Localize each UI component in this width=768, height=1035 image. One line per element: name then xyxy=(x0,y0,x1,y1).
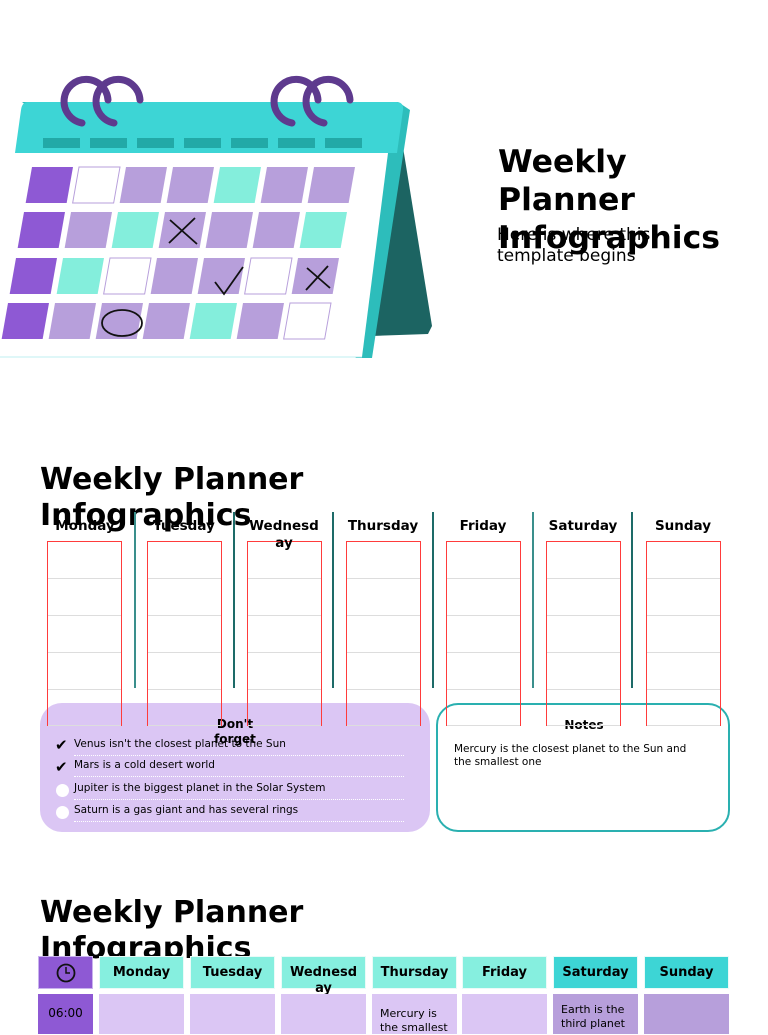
weekly columns: Sunday xyxy=(655,518,711,534)
checklist: Mars is a cold desert world xyxy=(74,759,215,771)
header dashes xyxy=(43,138,362,148)
header band xyxy=(15,102,403,153)
panel: notes xyxy=(436,703,730,832)
schedule table: Sunday xyxy=(659,965,714,980)
subtitle: Here is where this template begins xyxy=(497,225,650,266)
weekly columns: Tuesday xyxy=(153,518,215,534)
schedule table: Saturday xyxy=(562,965,629,980)
checklist xyxy=(55,736,404,822)
page edge xyxy=(22,102,410,358)
marks xyxy=(102,218,330,336)
schedule table: Thursday xyxy=(381,965,448,980)
title: top: Weekly Planner Infographics xyxy=(498,144,720,256)
heading: don't forget: Don't forget xyxy=(214,717,256,746)
stand back xyxy=(372,104,432,336)
rings xyxy=(64,79,350,123)
checklist: Saturn is a gas giant and has several rings xyxy=(74,804,298,816)
section 3 title: Weekly Planner Infographics xyxy=(40,895,303,966)
heading: notes: Notes xyxy=(564,718,604,732)
schedule table: Tuesday xyxy=(203,965,262,980)
schedule table: Mercury is the smallest xyxy=(380,1007,448,1034)
dividers xyxy=(134,512,633,688)
weekly columns: Thursday xyxy=(348,518,418,534)
weekly columns: Friday xyxy=(460,518,506,534)
weekly columns xyxy=(47,518,721,726)
schedule table xyxy=(38,956,729,1034)
schedule table: 06:00 xyxy=(48,1006,83,1020)
grid cells xyxy=(2,167,355,339)
checklist: Venus isn't the closest planet to the Sun xyxy=(74,738,286,750)
schedule table: Earth is the third planet xyxy=(561,1003,625,1030)
checklist: ✔ xyxy=(55,758,68,776)
panel: don't forget xyxy=(40,703,430,832)
weekly columns: Saturday xyxy=(549,518,617,534)
weekly columns: Monday xyxy=(55,518,115,534)
calendar illustration xyxy=(0,76,432,358)
schedule table: Wednesd ay xyxy=(290,965,357,996)
schedule table: Friday xyxy=(482,965,527,980)
icon: clock xyxy=(38,956,93,989)
weekly columns: Wednesd ay xyxy=(249,518,319,551)
section 2 title: Weekly Planner Infographics xyxy=(40,462,303,533)
white page xyxy=(0,153,388,357)
checklist: ✔ xyxy=(55,736,68,754)
notes text: Mercury is the closest planet to the Sun and the smallest one xyxy=(454,743,686,768)
schedule table: Monday xyxy=(113,965,170,980)
checklist: Jupiter is the biggest planet in the Solar System xyxy=(74,782,325,794)
